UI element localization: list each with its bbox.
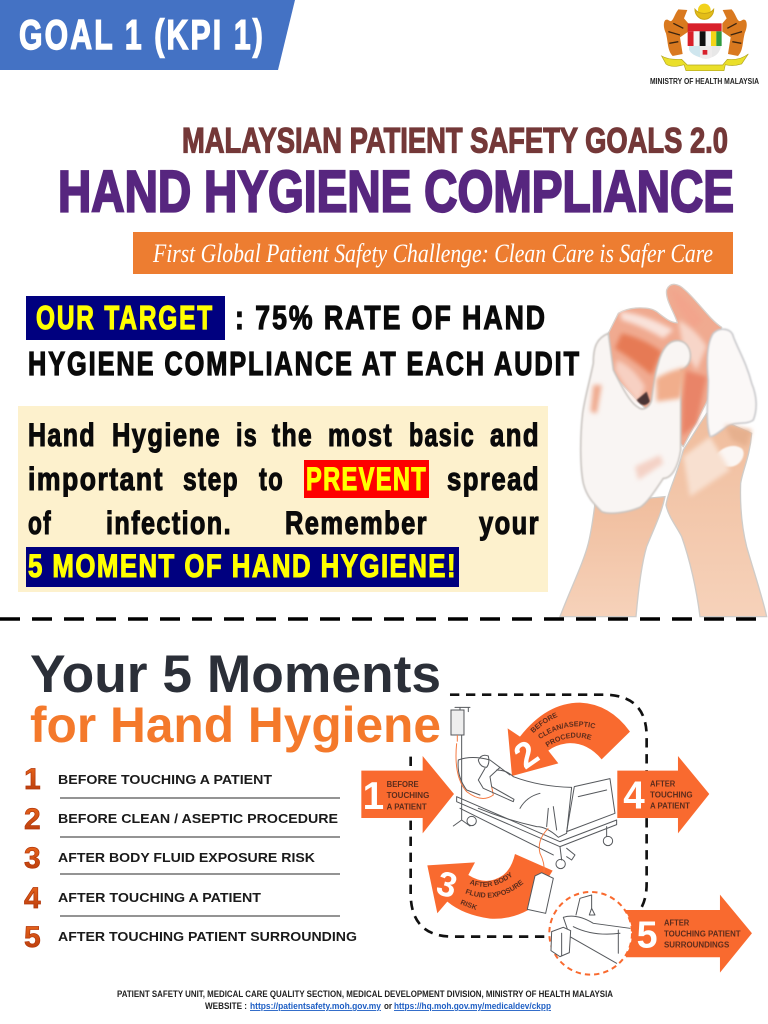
- arrow 5: AFTER: [664, 918, 690, 927]
- goal banner: [0, 0, 295, 70]
- list: five moments: AFTER BODY FLUID EXPOSURE RISK: [58, 850, 316, 865]
- arrow 2: BEFORE: [530, 712, 558, 733]
- arrow 4: [617, 756, 709, 833]
- target text: HYGIENE COMPLIANCE AT EACH AUDIT: [28, 345, 581, 382]
- arrow 1: [361, 756, 454, 833]
- arrow 2: 2: [506, 732, 546, 777]
- arrow 3: 3: [433, 864, 461, 906]
- callout: hand hygiene message: Remember: [285, 505, 428, 541]
- callout: hand hygiene message: to: [259, 461, 284, 497]
- illustration: patient surroundings: [549, 892, 632, 975]
- callout: hand hygiene message: the: [272, 417, 313, 453]
- our target label: OUR TARGET: [36, 299, 214, 336]
- callout: hand hygiene message: is: [236, 417, 258, 453]
- arrow 4: TOUCHING: [650, 790, 693, 799]
- callout: hand hygiene message: your: [479, 505, 540, 541]
- footer text: or: [384, 1001, 392, 1011]
- callout: hand hygiene message: 5 MOMENT OF HAND HYGIENE!: [28, 548, 457, 584]
- heading: for Hand Hygiene: for Hand Hygiene: [30, 697, 441, 753]
- arrow 3: AFTER BODY: [470, 872, 512, 887]
- subtitle bar: [133, 232, 733, 274]
- arrow 5: 5: [637, 914, 658, 956]
- list: five moments: AFTER TOUCHING PATIENT SURROUNDING: [58, 929, 357, 944]
- goal banner: GOAL 1 (KPI 1): [19, 11, 265, 58]
- arrow 2: [506, 702, 630, 777]
- our target label: [26, 296, 225, 340]
- callout: hand hygiene message: [18, 406, 548, 592]
- callout: hand hygiene message: spread: [447, 461, 540, 497]
- footer text: https://hq.moh.gov.my/medicaldev/ckpp: [394, 1001, 551, 1011]
- list: five moments: 5: [24, 921, 41, 954]
- arrow 2: PROCEDURE: [545, 732, 592, 747]
- arrow 1: TOUCHING: [387, 791, 429, 800]
- arrow 4: AFTER: [650, 779, 676, 788]
- list: five moments: BEFORE CLEAN / ASEPTIC PROCEDURE: [58, 811, 338, 826]
- callout: hand hygiene message: Hygiene: [112, 417, 221, 453]
- arrow 3: FLUID EXPOSURE: [466, 880, 524, 898]
- footer text: [117, 989, 613, 1011]
- icon: Malaysian coat of arms: [662, 4, 748, 71]
- list: five moments: 4: [24, 882, 41, 915]
- callout: hand hygiene message: and: [490, 417, 540, 453]
- arrow 1: BEFORE: [387, 780, 419, 789]
- list: five moments: [24, 763, 357, 954]
- list: five moments: 1: [24, 763, 41, 796]
- list: five moments: BEFORE TOUCHING A PATIENT: [58, 772, 272, 787]
- list: five moments: AFTER TOUCHING A PATIENT: [58, 890, 261, 905]
- illustration: patient in bed: [451, 707, 617, 913]
- diagram: five moments around patient: [361, 693, 752, 976]
- callout: hand hygiene message: most: [328, 417, 393, 453]
- list: five moments: 3: [24, 842, 41, 875]
- arrow 4: 4: [623, 774, 645, 817]
- arrow 2: CLEAN/ASEPTIC: [538, 721, 596, 738]
- callout: hand hygiene message: step: [183, 461, 239, 497]
- photo: soapy hands: [560, 284, 767, 617]
- arrow 1: 1: [363, 775, 384, 818]
- target text: [28, 299, 581, 382]
- callout: hand hygiene message: infection.: [106, 505, 232, 541]
- footer text: WEBSITE :: [205, 1001, 247, 1011]
- target text: : 75% RATE OF HAND: [235, 299, 547, 336]
- arrow 5: TOUCHING PATIENT: [664, 929, 741, 938]
- list: five moments: 2: [24, 803, 41, 836]
- callout: hand hygiene message: important: [28, 461, 164, 497]
- arrow 3: RISK: [460, 900, 478, 910]
- footer text: PATIENT SAFETY UNIT, MEDICAL CARE QUALITY SECTION, MEDICAL DEVELOPMENT DIVISION, MINISTRY OF HEALTH MALAYSIA: [117, 989, 613, 999]
- arrow 5: SURROUNDINGS: [664, 940, 730, 949]
- arrow 5: [626, 895, 752, 973]
- callout: hand hygiene message: of: [28, 505, 52, 541]
- callout: hand hygiene message: basic: [409, 417, 475, 453]
- footer text: https://patientsafety.moh.gov.my: [250, 1001, 381, 1011]
- arrow 4: A PATIENT: [650, 801, 690, 810]
- arrow 1: A PATIENT: [387, 802, 427, 811]
- callout: hand hygiene message: Hand: [28, 417, 96, 453]
- heading: Your 5 Moments: Your 5 Moments: [30, 645, 441, 704]
- arrow 3: [427, 814, 593, 956]
- callout: hand hygiene message: PREVENT: [306, 461, 427, 497]
